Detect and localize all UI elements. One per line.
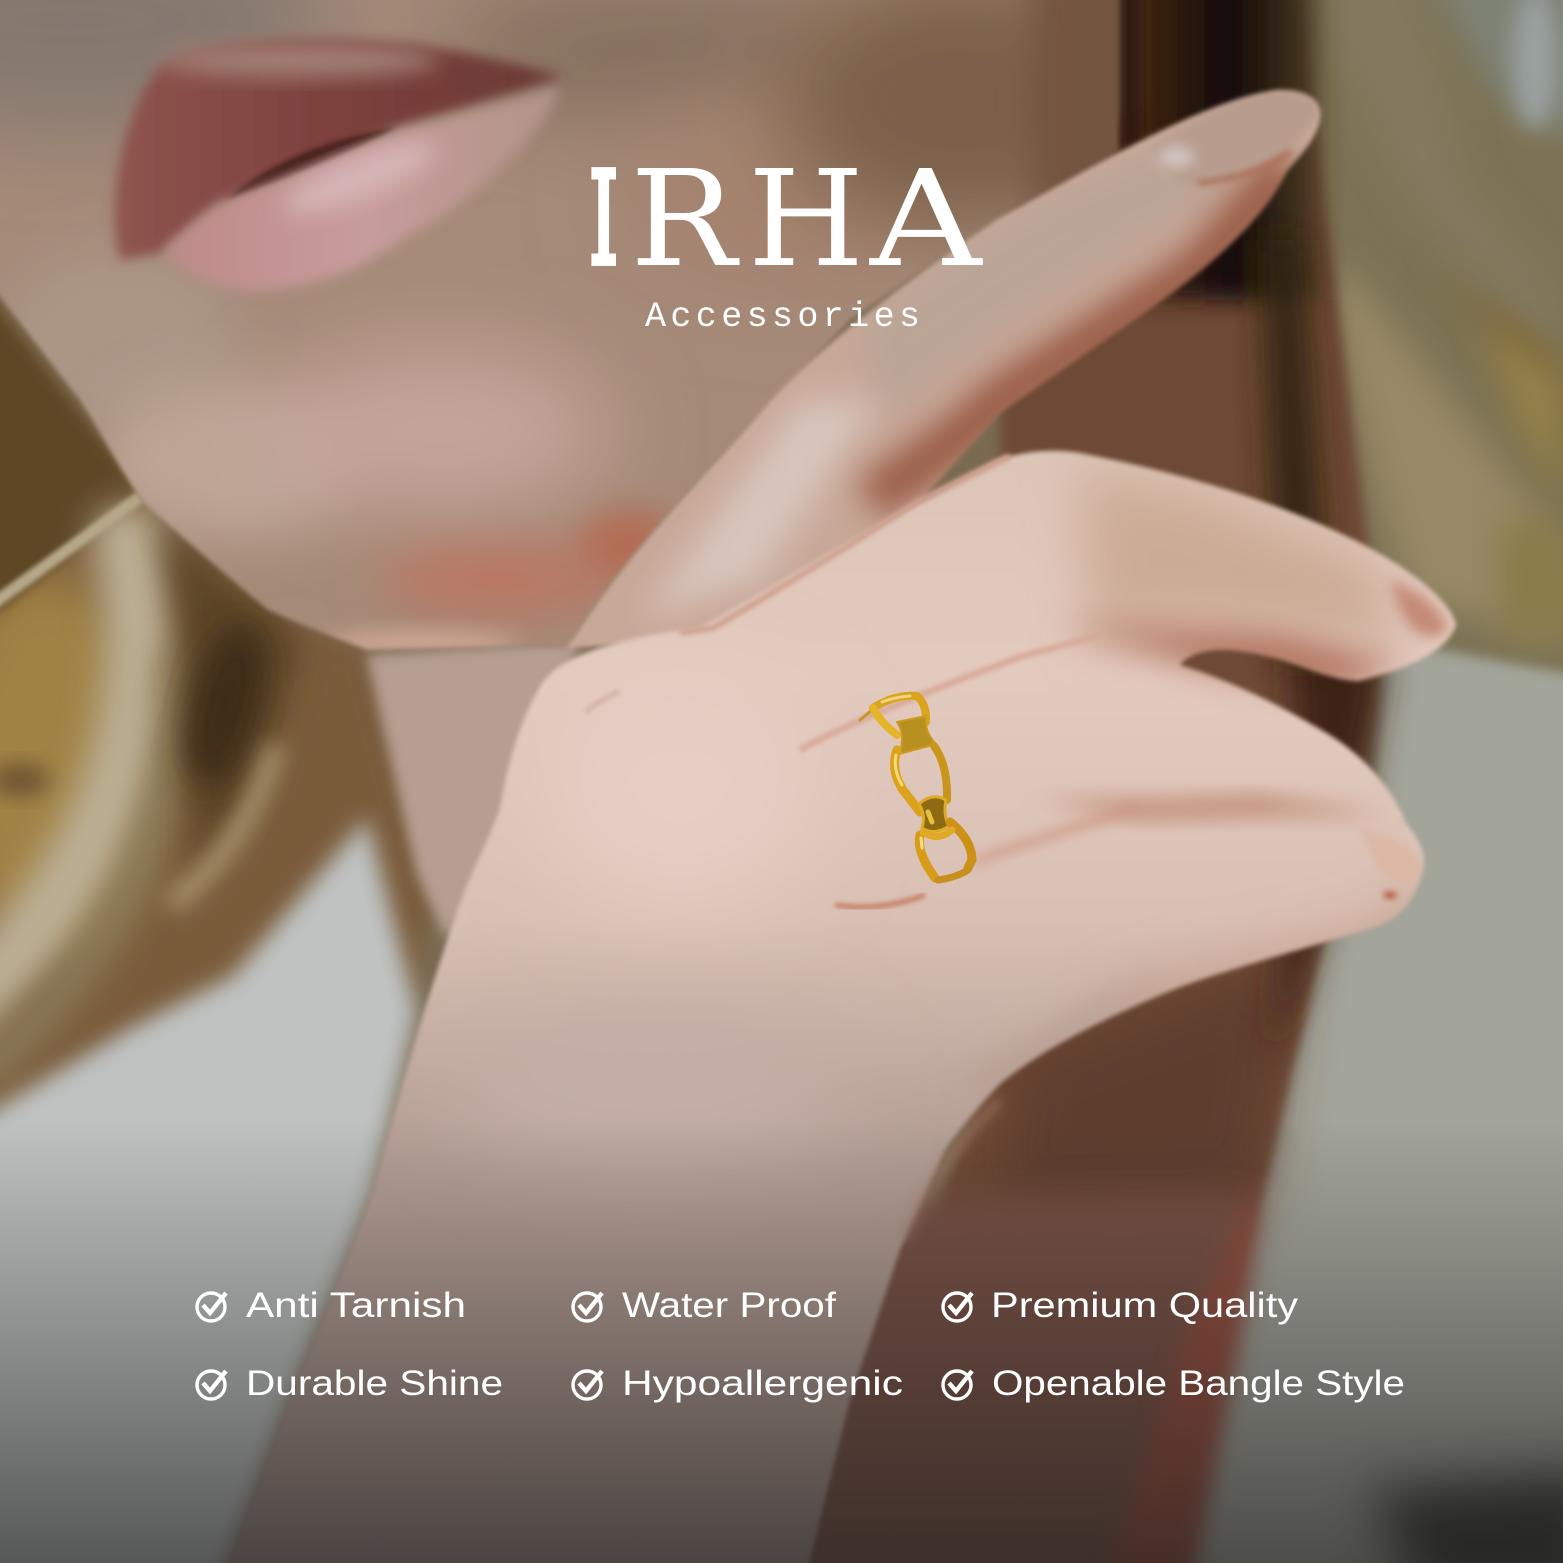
feature: Anti Tarnish (197, 1286, 466, 1325)
wrist crease (905, 1100, 1000, 1240)
link 1 (873, 696, 926, 722)
left blonde hair (0, 260, 430, 1180)
white shirt left (0, 818, 417, 1563)
photo: bottom dark fade (0, 1120, 1563, 1563)
title: brand name: A (869, 141, 984, 296)
photo: raised index finger (568, 86, 1324, 650)
subtitle: Accessories (645, 297, 920, 337)
feature: Openable Bangle Style: Openable Bangle Style (992, 1364, 1405, 1403)
link 2 (895, 750, 920, 812)
title: brand name (589, 141, 984, 297)
photo: neck (367, 0, 1385, 1563)
knuckle and finger tones (578, 738, 784, 906)
white shirt right (1155, 640, 1563, 1563)
photo: gold chain ring (860, 696, 972, 880)
plate 2 (919, 797, 949, 832)
feature: Anti Tarnish: Anti Tarnish (246, 1286, 466, 1325)
shirt shadow at lower right (1370, 1470, 1563, 1563)
feature: Hypoallergenic: Hypoallergenic (622, 1364, 903, 1403)
finger creases (680, 456, 1010, 633)
title: brand name: I (589, 145, 618, 294)
feature: Water Proof: Water Proof (622, 1286, 836, 1325)
photo: hand (237, 448, 1458, 1563)
plate 1 (897, 716, 936, 754)
fingernail (1172, 92, 1318, 170)
photo: face and jaw (0, 0, 1120, 652)
title: brand name: R (630, 143, 740, 297)
right blonde hair (1240, 0, 1563, 700)
feature: Premium Quality: Premium Quality (991, 1286, 1299, 1325)
photo: lips (115, 40, 563, 291)
link 3 (919, 835, 935, 878)
feature: Durable Shine: Durable Shine (246, 1364, 503, 1403)
title: brand name: H (748, 143, 864, 297)
